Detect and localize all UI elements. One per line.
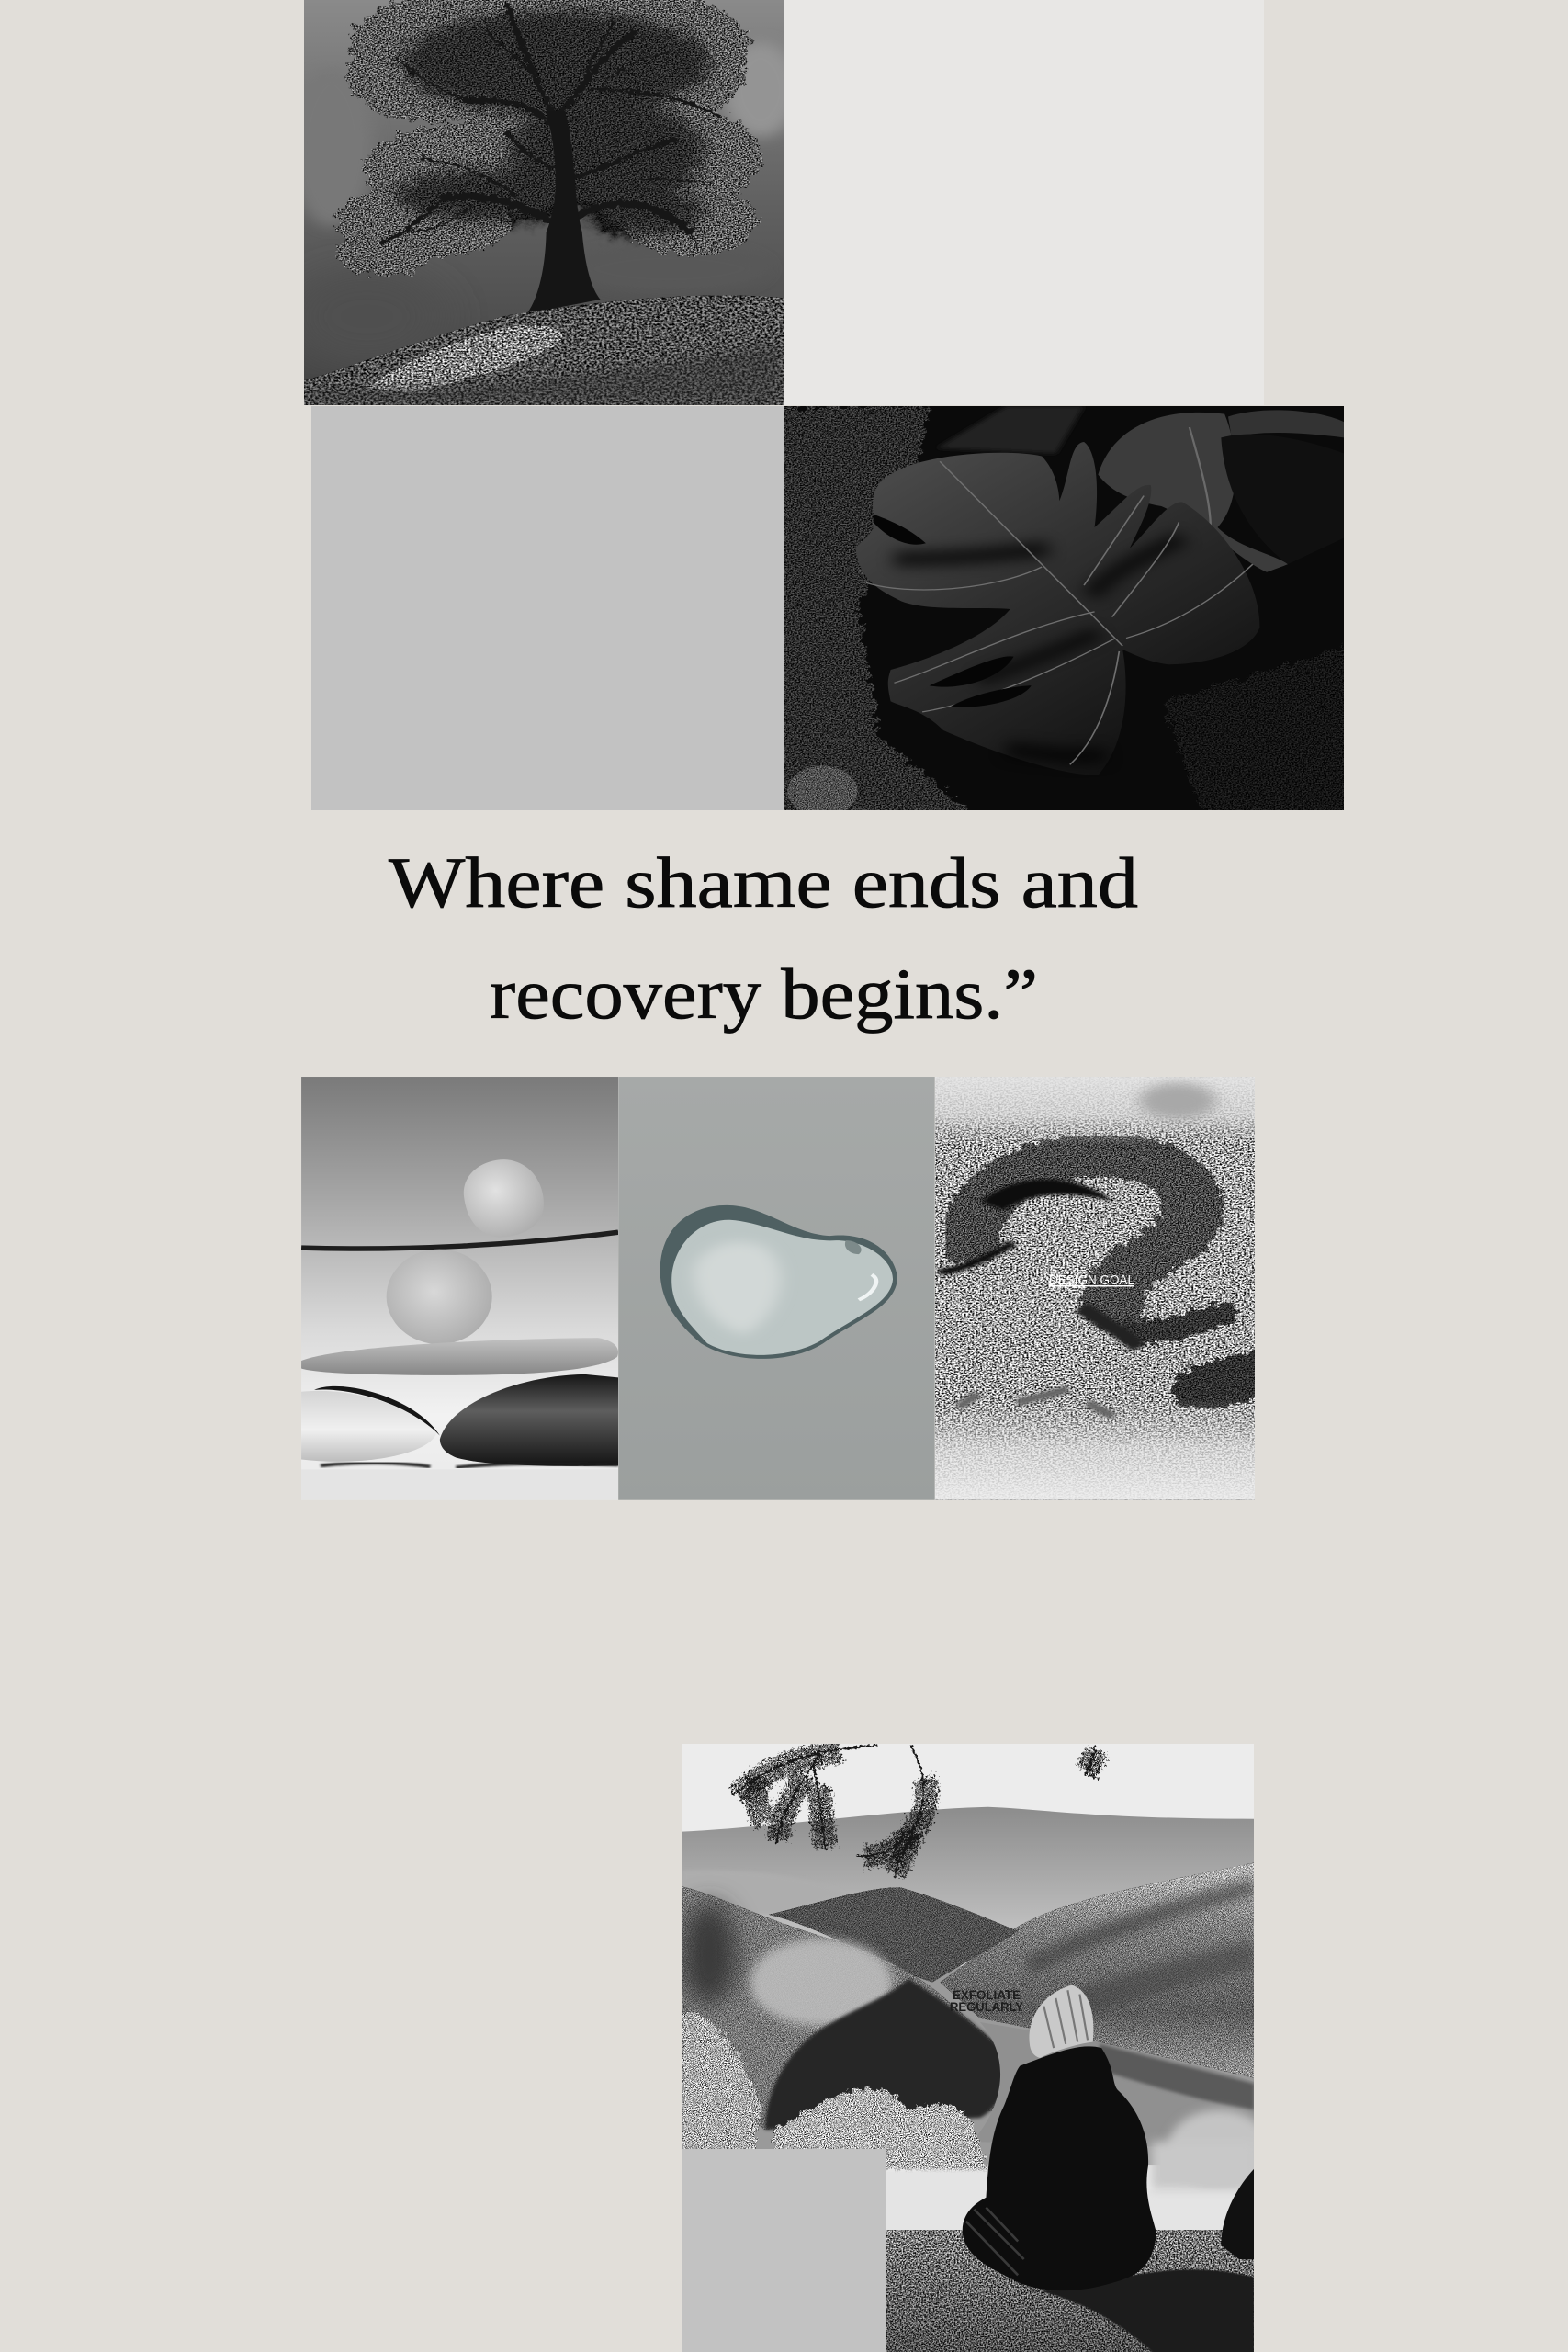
frosted bushes (682, 2013, 992, 2177)
overhanging branches (733, 1746, 1096, 1878)
quote text: Where shame ends and (389, 842, 1138, 922)
beanie (1029, 1985, 1093, 2058)
photo: dark monstera leaves (768, 405, 1359, 818)
caption: DESIGN GOAL: DESIGN GOAL (1049, 1272, 1134, 1288)
caption: EXFOLIATE REGULARLY: REGULARLY (950, 1999, 1024, 2014)
quote text: recovery begins.” (490, 954, 1038, 1034)
panel: mid-grey blank block (311, 406, 784, 810)
person (963, 2046, 1156, 2290)
grassy hill (304, 296, 784, 405)
leaf shadow bands (894, 537, 1182, 756)
photo: lone oak tree on a hill (289, 0, 799, 405)
moodboard canvas (301, 0, 1344, 2352)
photo: embroidered question mark on fabric (935, 1077, 1255, 1500)
quote text (389, 842, 1138, 1034)
caption: EXFOLIATE REGULARLY (950, 1987, 1024, 2014)
question mark glyph (968, 1155, 1248, 1389)
tree crown (335, 0, 761, 276)
fabric depth-of-field haze (935, 1077, 1255, 1500)
panel: grey block over landscape (682, 2149, 886, 2352)
photo: person overlooking forested valley (682, 1744, 1271, 2352)
rear leaf (1098, 413, 1288, 572)
backpack (1221, 2169, 1254, 2259)
pebble (787, 766, 858, 810)
photo: clear gel droplet (618, 1077, 935, 1500)
main leaf (855, 442, 1259, 775)
grass (886, 2230, 1254, 2352)
panel: pale blank block (784, 0, 1264, 405)
bright ground (886, 2166, 988, 2180)
photo: balanced stones (301, 1077, 618, 1500)
forested slopes (941, 1862, 1254, 2078)
caption: EXFOLIATE REGULARLY: EXFOLIATE (953, 1987, 1021, 2002)
river (972, 2022, 1254, 2150)
tree trunk and branches (381, 6, 718, 248)
mottled ground (784, 406, 968, 810)
